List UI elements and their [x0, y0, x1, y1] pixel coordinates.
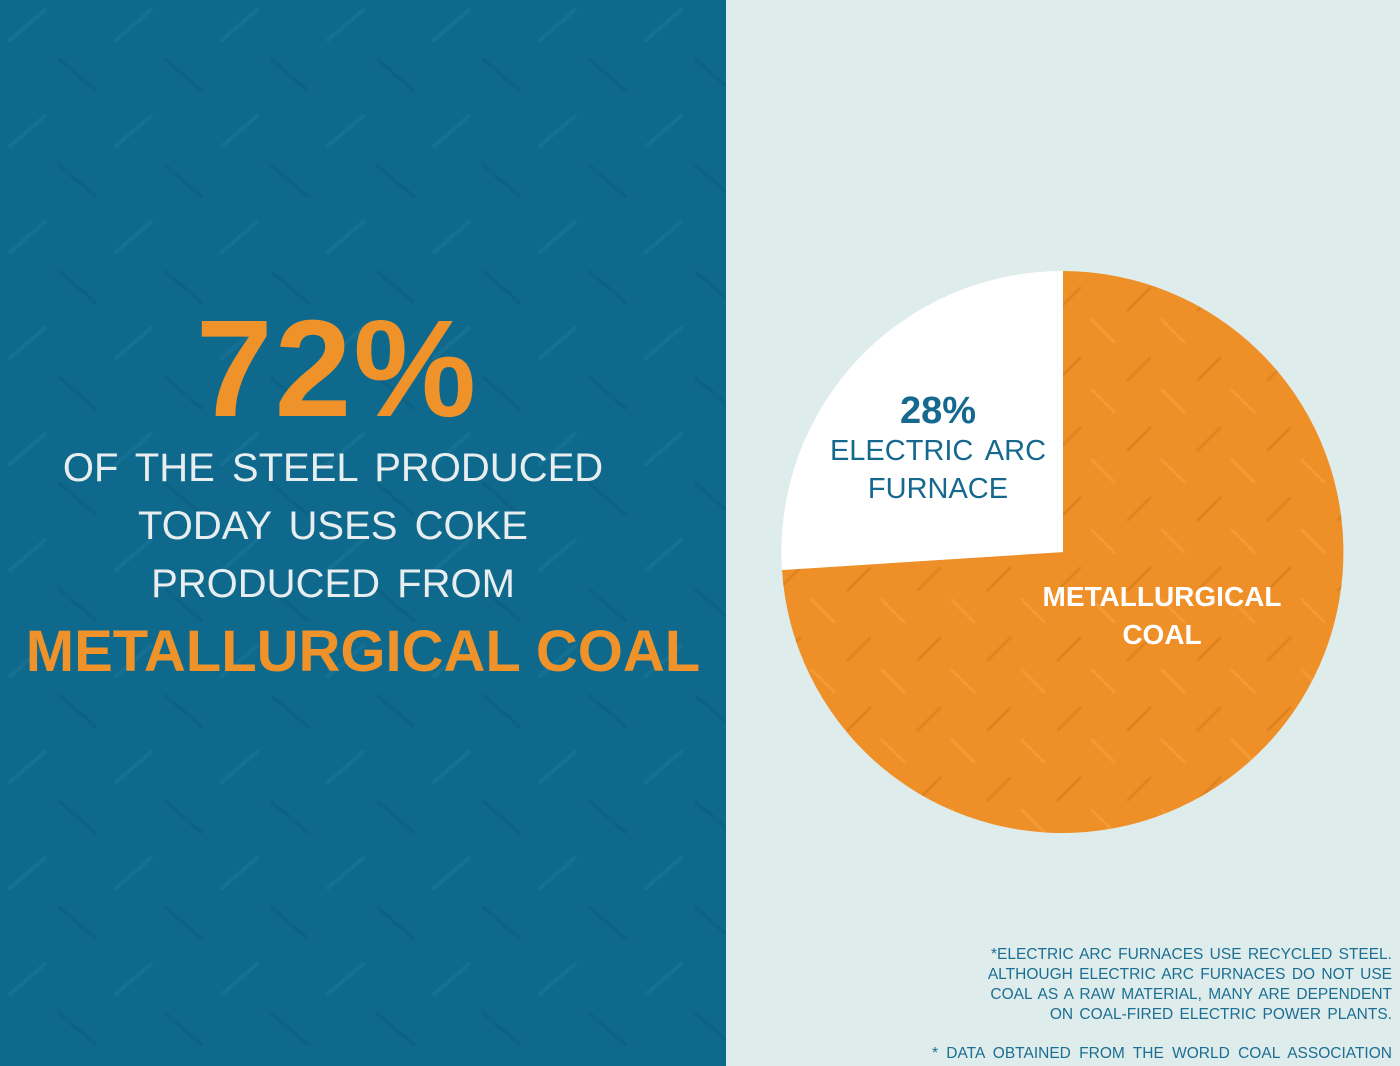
pie label: 28%: FURNACE: [868, 473, 1008, 505]
text block: description: PRODUCED FROM: [151, 562, 515, 606]
slice: metallurgical coal 72%: [782, 271, 1343, 833]
pie label: 28%: 28%: [900, 390, 976, 432]
pie label: metallurgical coal: METALLURGICAL: [1042, 581, 1282, 612]
footnote: *ELECTRIC ARC FURNACES USE RECYCLED STEEL.: [991, 946, 1392, 963]
highlight: metallurgical coal: METALLURGICAL COAL: [26, 619, 700, 684]
text block: description: TODAY USES COKE: [138, 504, 528, 548]
slice: electric arc furnace 28%: [781, 271, 1063, 570]
big stat 72%: 72%: [196, 292, 478, 446]
pie label: metallurgical coal: COAL: [1122, 619, 1202, 650]
text block: description: OF THE STEEL PRODUCED: [63, 446, 603, 490]
text block: description: [63, 446, 603, 606]
source note: * DATA OBTAINED FROM THE WORLD COAL ASSOCIATION: [932, 1045, 1392, 1062]
footnote: COAL AS A RAW MATERIAL, MANY ARE DEPENDENT: [990, 986, 1392, 1003]
pie label: metallurgical coal: [1042, 581, 1282, 650]
pie label: 28%: ELECTRIC ARC: [830, 435, 1046, 467]
panel: left blue: [0, 0, 726, 1066]
footnote: ALTHOUGH ELECTRIC ARC FURNACES DO NOT USE: [988, 966, 1392, 983]
footnote: ON COAL-FIRED ELECTRIC POWER PLANTS.: [1050, 1006, 1392, 1023]
pie label: 28%: [830, 390, 1046, 505]
footnote: [988, 946, 1392, 1023]
